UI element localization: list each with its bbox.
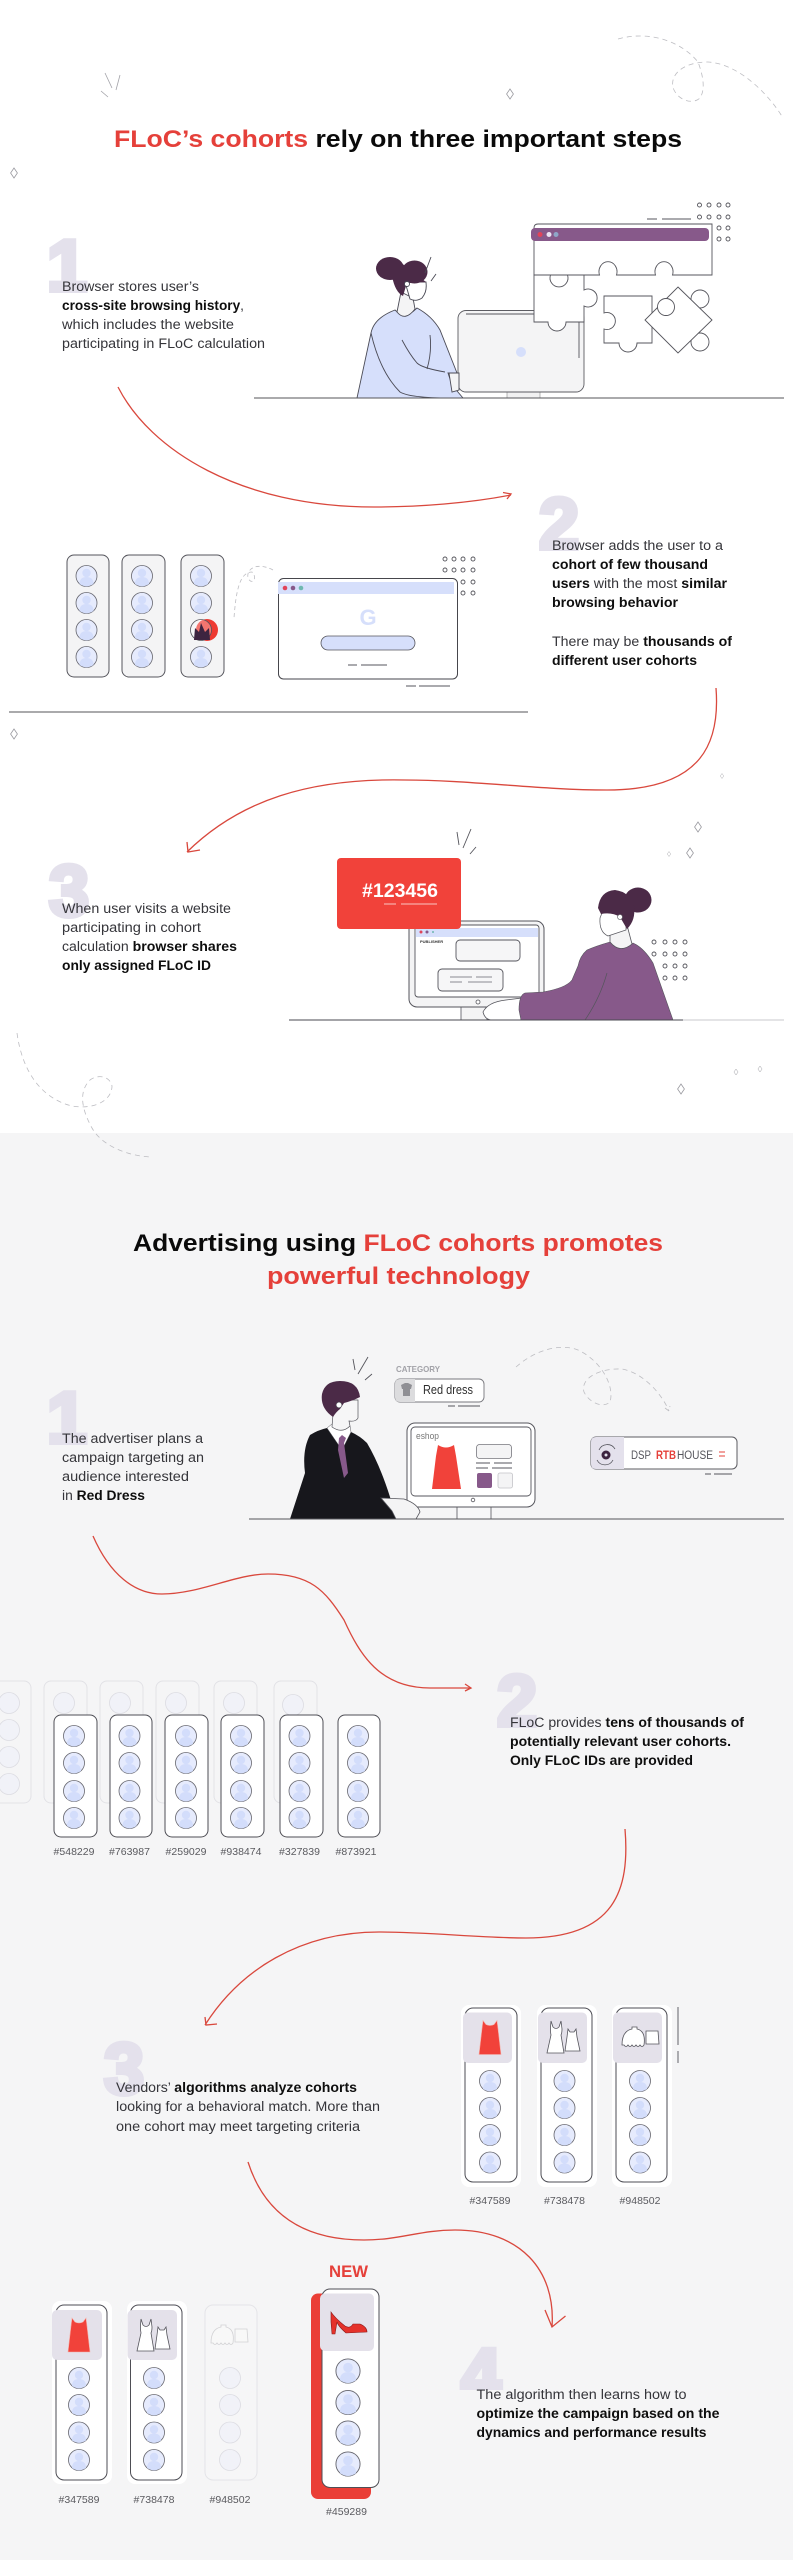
step 2 text: FLoC provides tens of thousands of [510, 1715, 745, 1730]
step 2 text: There may be thousands of [552, 634, 733, 649]
puzzle piece 2 [604, 296, 652, 352]
browser window with puzzle edge [531, 224, 712, 275]
step 2 number: 2 [497, 1662, 537, 1742]
step 3 number: 3 [104, 2030, 144, 2110]
section: white background [0, 0, 793, 1133]
step 3 text [116, 2080, 380, 2134]
step 3 text: only assigned FLoC ID [62, 958, 211, 973]
step 2 text: potentially relevant user cohorts. [510, 1734, 731, 1749]
title: FLoC's cohorts: FLoC’s cohorts rely on three important steps [114, 126, 682, 153]
illustration: woman at computer with puzzle browser [254, 203, 784, 398]
monitor: PUBLISHER [420, 939, 443, 944]
step 2 text: cohort of few thousand [552, 557, 708, 572]
cohort card 548229 [54, 1715, 97, 1858]
man in suit [290, 1381, 420, 1519]
arrow: step 1 to 2 [118, 387, 511, 507]
faded background cohort cards [0, 1681, 317, 1803]
spark [353, 1357, 372, 1380]
monitor: eshop [416, 1431, 439, 1442]
decoration: small diamonds top [11, 89, 513, 178]
FLoC ID card [337, 858, 461, 929]
dashed arrow [516, 1347, 670, 1411]
decoration: small diamonds bottom [678, 1066, 762, 1094]
side marker line [677, 2007, 679, 2063]
step 1 text: audience interested [62, 1469, 189, 1484]
optimized cohort card 347589 [52, 2301, 112, 2506]
dots grid [698, 203, 730, 241]
step 1 text: cross-site browsing history, [62, 298, 244, 313]
step 4 text [476, 2387, 720, 2440]
step 1 text: campaign targeting an [62, 1450, 204, 1465]
ground line [249, 1518, 784, 1520]
illustration: cohort cards and browser [9, 555, 528, 712]
cohort card 2 [122, 555, 165, 677]
new cohort card 459289: #459289 [326, 2506, 367, 2518]
cohort card 1 [67, 555, 109, 677]
step 2 text [552, 538, 733, 668]
step 1 text: in Red Dress [62, 1488, 145, 1503]
cohort card 763987 [109, 1715, 152, 1858]
dots grid [652, 940, 687, 980]
woman [357, 257, 463, 398]
step 4 text: The algorithm then learns how to [476, 2387, 686, 2402]
step 1 text [62, 1431, 204, 1503]
arrow: step 3 to 4 [248, 2162, 566, 2327]
step 2 text: Only FLoC IDs are provided [510, 1753, 693, 1768]
step 1 text: The advertiser plans a [62, 1431, 204, 1446]
cohort card 873921: #873921 [336, 1846, 377, 1858]
step 2 text: users with the most similar [552, 576, 728, 591]
monitor [458, 310, 584, 398]
NEW label: NEW [329, 2262, 369, 2281]
step 2 text: Browser adds the user to a [552, 538, 724, 553]
faded cohort card 948502: #948502 [210, 2494, 251, 2506]
cohort card 327839 [279, 1715, 323, 1858]
FLoC ID card: #123456 [362, 881, 438, 902]
cohort card 327839: #327839 [279, 1846, 320, 1858]
woman [483, 888, 673, 1020]
step 3 text: participating in cohort [62, 920, 201, 935]
step 3 text: When user visits a website [62, 901, 231, 916]
matched cohort card 738478 [537, 2005, 597, 2207]
decoration: top left spark [101, 73, 120, 97]
optimized cohort card 347589: #347589 [59, 2494, 100, 2506]
step 1 text: Browser stores user’s [62, 279, 199, 294]
step 3 text: one cohort may meet targeting criteria [116, 2119, 361, 2134]
title: Advertising using FLoC cohorts: Advertising using FLoC cohorts promotes [133, 1230, 663, 1257]
monitor [409, 921, 544, 1020]
cohort card 259029 [165, 1715, 208, 1858]
matched cohort card 738478: #738478 [544, 2195, 585, 2207]
step 4 text: dynamics and performance results [476, 2425, 706, 2440]
ground line [254, 397, 784, 399]
arrow: step 1 to 2 [93, 1536, 471, 1691]
monitor [407, 1423, 535, 1519]
dots grid [443, 557, 475, 595]
step 4 text: optimize the campaign based on the [476, 2406, 720, 2421]
optimized cohort card 738478: #738478 [134, 2494, 175, 2506]
illustration: advertiser at eshop monitor [249, 1347, 784, 1519]
title: Advertising using FLoC cohorts: powerful technology [267, 1263, 531, 1290]
DSP RTB House box [591, 1437, 737, 1474]
step 3 text: Vendors’ algorithms analyze cohorts [116, 2080, 357, 2095]
cohort card 938474 [221, 1715, 264, 1858]
category selector: Red dress [423, 1383, 473, 1397]
arrow: step 2 to 3 [205, 1829, 626, 2025]
cohort card 763987: #763987 [109, 1846, 150, 1858]
decoration: small diamonds middle [11, 729, 724, 858]
cohort card 873921 [336, 1715, 380, 1858]
section: gray background [0, 1133, 793, 2560]
step 3 text: calculation browser shares [62, 939, 237, 954]
puzzle piece 3 [645, 287, 712, 353]
illustration: woman at monitor with FLoC ID [289, 829, 784, 1020]
arrow: step 2 to 3 [187, 688, 717, 852]
decoration: bottom left dashed loop [17, 1033, 151, 1157]
faded cohort card 948502 [205, 2305, 257, 2506]
step 2 text: different user cohorts [552, 653, 697, 668]
decoration: top right dashed loop [618, 36, 783, 118]
DSP RTB House box: RTB [656, 1450, 676, 1462]
step 1 number: 1 [47, 1378, 87, 1458]
spark [457, 829, 476, 854]
matched cohort card 347589: #347589 [470, 2195, 511, 2207]
matched cohort card 948502 [612, 2005, 672, 2207]
puzzle piece 1 [534, 275, 597, 331]
optimized cohort card 738478 [127, 2301, 187, 2506]
step 1 text: which includes the website [61, 317, 234, 332]
DSP RTB House box: DSP [631, 1450, 651, 1462]
step 1 number: 1 [47, 226, 87, 306]
dashed path [234, 566, 273, 618]
cohort card 259029: #259029 [166, 1846, 207, 1858]
browser window: G [359, 605, 377, 630]
category selector: CATEGORY [396, 1364, 440, 1374]
step 3 text: looking for a behavioral match. More than [116, 2099, 380, 2114]
step 2 text [510, 1715, 745, 1768]
cohort card 548229: #548229 [54, 1846, 95, 1858]
step 2 text: browsing behavior [552, 595, 679, 610]
DSP RTB House box: HOUSE [677, 1450, 713, 1462]
step 3 text [62, 901, 237, 973]
new cohort card 459289 [311, 2289, 379, 2518]
cohort card 938474: #938474 [221, 1846, 262, 1858]
cohort card 3 with user [181, 555, 224, 677]
step 1 text: participating in FLoC calculation [62, 336, 265, 351]
category selector [395, 1364, 484, 1406]
title: Advertising using FLoC cohorts [133, 1230, 663, 1290]
step 1 text [61, 279, 265, 351]
matched cohort card 347589 [461, 2005, 521, 2207]
step 4 number: 4 [461, 2335, 501, 2415]
ground line [289, 1019, 683, 1021]
step 3 number: 3 [49, 852, 89, 932]
browser window [278, 578, 458, 679]
step 2 number: 2 [539, 484, 579, 564]
matched cohort card 948502: #948502 [620, 2195, 661, 2207]
